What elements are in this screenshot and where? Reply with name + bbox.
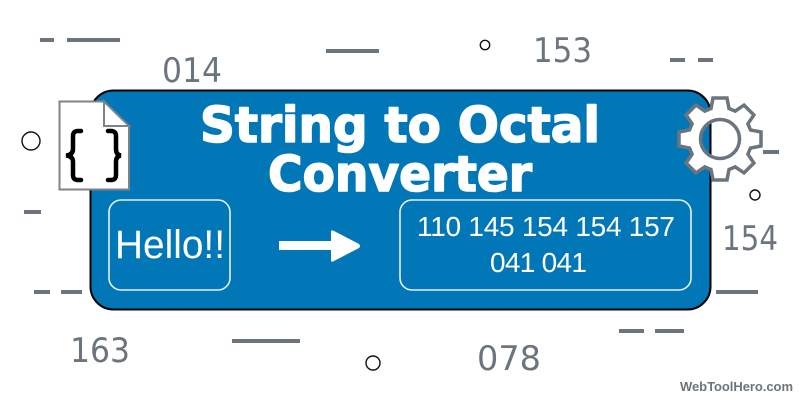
output box: octal values: 041 041 [490, 247, 587, 278]
title: String to Octal [200, 97, 600, 154]
arrow [279, 230, 360, 262]
icon: gear [679, 98, 761, 180]
watermark: WebToolHero.com [680, 379, 793, 394]
floating octal numbers: 153 [533, 31, 592, 71]
floating octal numbers: 014 [162, 51, 222, 91]
decorative circles [22, 40, 760, 370]
floating octal numbers: 163 [70, 331, 130, 371]
floating octal numbers [70, 31, 778, 379]
input box: Hello!!: Hello!! [115, 223, 225, 267]
input box: Hello!! [109, 200, 230, 290]
title: Converter [268, 146, 533, 203]
output box: octal values [400, 200, 691, 290]
icon: code file [60, 102, 129, 190]
panel: converter [90, 90, 710, 310]
floating octal numbers: 154 [722, 219, 778, 259]
title [200, 97, 600, 203]
output box: octal values: 110 145 154 154 157 [417, 211, 675, 242]
floating octal numbers: 078 [477, 339, 541, 379]
